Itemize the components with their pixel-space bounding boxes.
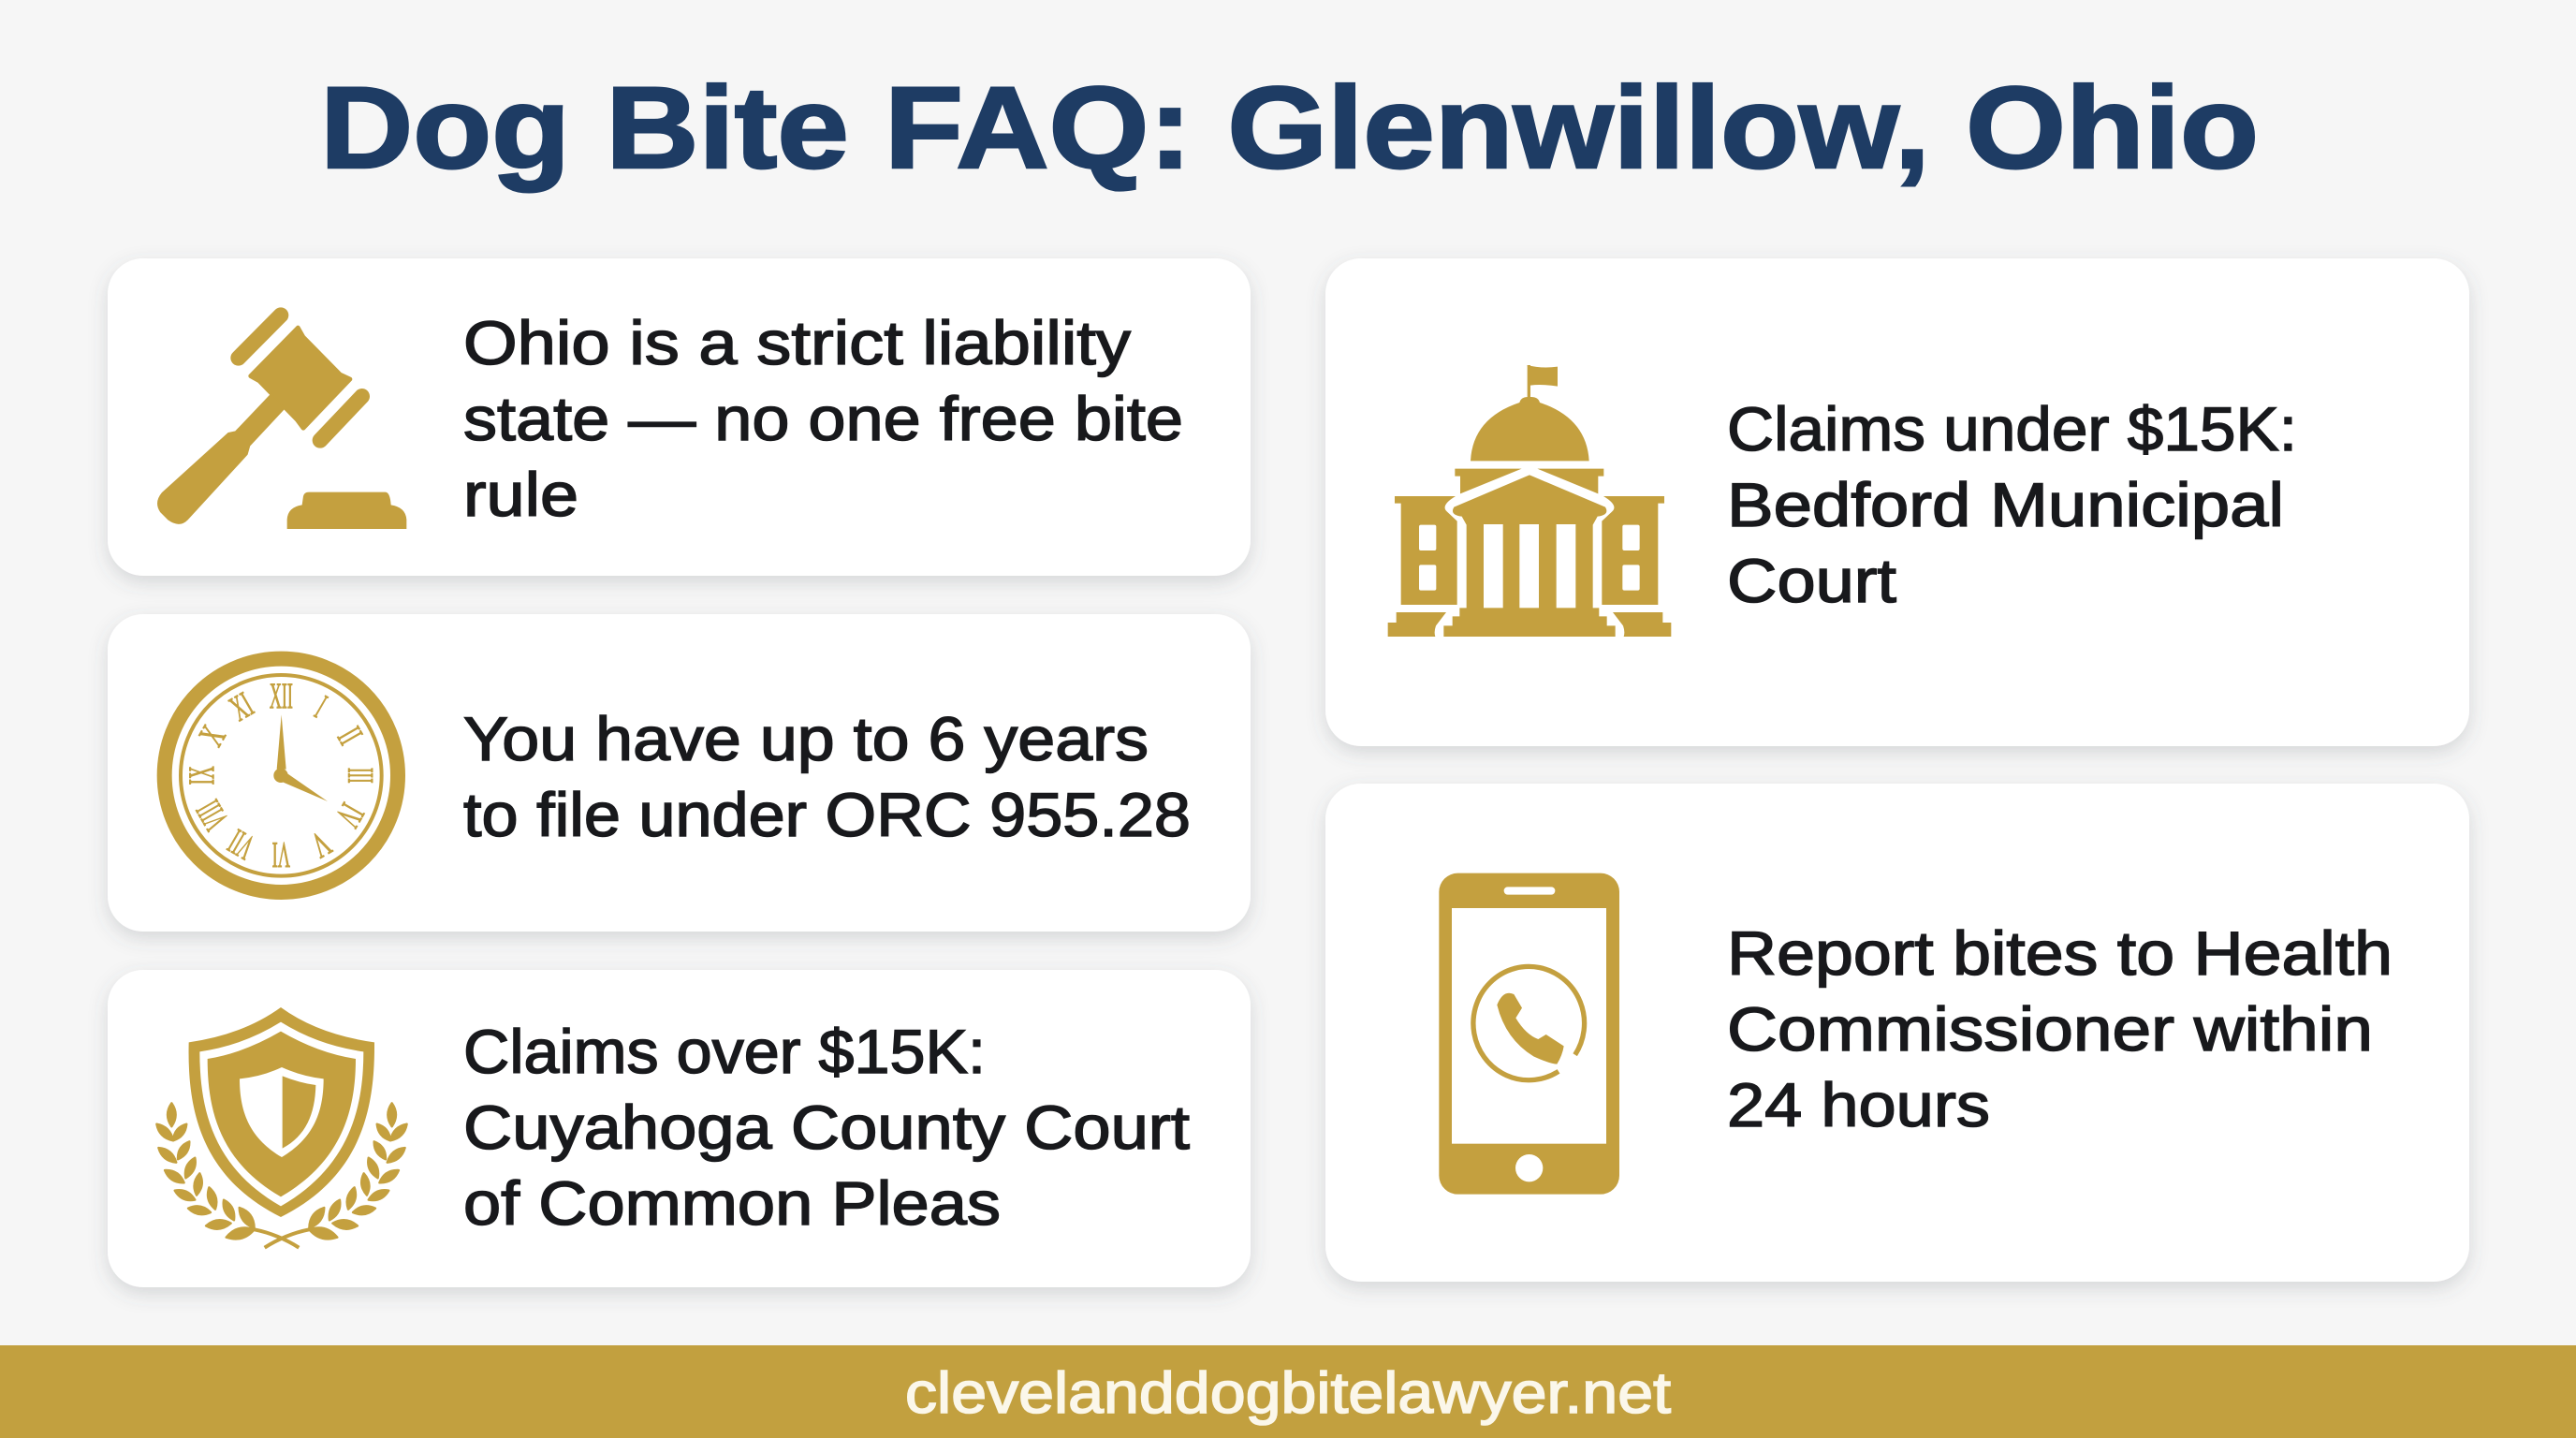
text: claims over 15K: Cuyahoga County Court [463, 1093, 1190, 1162]
icon: clock: X [192, 719, 234, 753]
text: strict liability: state — no one free bite [463, 384, 1183, 453]
text: strict liability: Ohio is a strict liability [463, 308, 1131, 377]
text: claims under 15K [1727, 394, 2297, 615]
panel: filing deadline [108, 614, 1251, 932]
text: claims under 15K: Claims under $15K: [1727, 394, 2297, 463]
text: claims over 15K: Claims over $15K: [463, 1017, 986, 1086]
icon: clock: XI [224, 685, 260, 729]
text: claims under 15K: Bedford Municipal [1727, 470, 2284, 539]
footer url: clevelanddogbitelawyer.net [905, 1361, 1671, 1426]
text: claims under 15K: Court [1727, 546, 1896, 615]
icon: clock: IV [328, 797, 372, 833]
text: strict liability [463, 308, 1183, 529]
text: strict liability: rule [463, 460, 578, 529]
icon: shield with laurels [156, 1007, 407, 1248]
text: claims over 15K [463, 1017, 1190, 1238]
icon: smartphone with phone symbol [1439, 873, 1619, 1195]
icon: clock: VII [222, 821, 261, 867]
icon: clock: IX [183, 766, 222, 785]
icon: gavel [158, 315, 406, 529]
text: report bites: Commissioner within [1727, 994, 2373, 1064]
icon: clock: VIII [189, 794, 237, 836]
icon: clock: VI [272, 835, 290, 874]
text: report bites [1727, 918, 2393, 1139]
footer bar [0, 1345, 2576, 1438]
text: filing deadline: You have up to 6 years [463, 704, 1149, 773]
panel: claims over 15K [108, 970, 1251, 1287]
icon: clock [165, 659, 398, 892]
text: claims over 15K: of Common Pleas [463, 1168, 1001, 1238]
icon: clock: XII [270, 677, 293, 716]
icon: courthouse [1388, 365, 1671, 637]
icon: clock: I [309, 689, 332, 726]
text: report bites: Report bites to Health [1727, 918, 2393, 988]
icon: clock: II [329, 721, 370, 751]
panel: report bites [1325, 784, 2469, 1282]
text: report bites: 24 hours [1727, 1070, 1990, 1139]
icon: clock: V [304, 823, 337, 865]
title: Dog Bite FAQ: Glenwillow, Ohio [320, 64, 2259, 193]
text: filing deadline [463, 704, 1191, 849]
panel: strict liability [108, 258, 1251, 576]
panel: claims under 15K [1325, 258, 2469, 746]
text: filing deadline: to file under ORC 955.28 [463, 780, 1191, 849]
icon: clock: III [341, 768, 380, 784]
